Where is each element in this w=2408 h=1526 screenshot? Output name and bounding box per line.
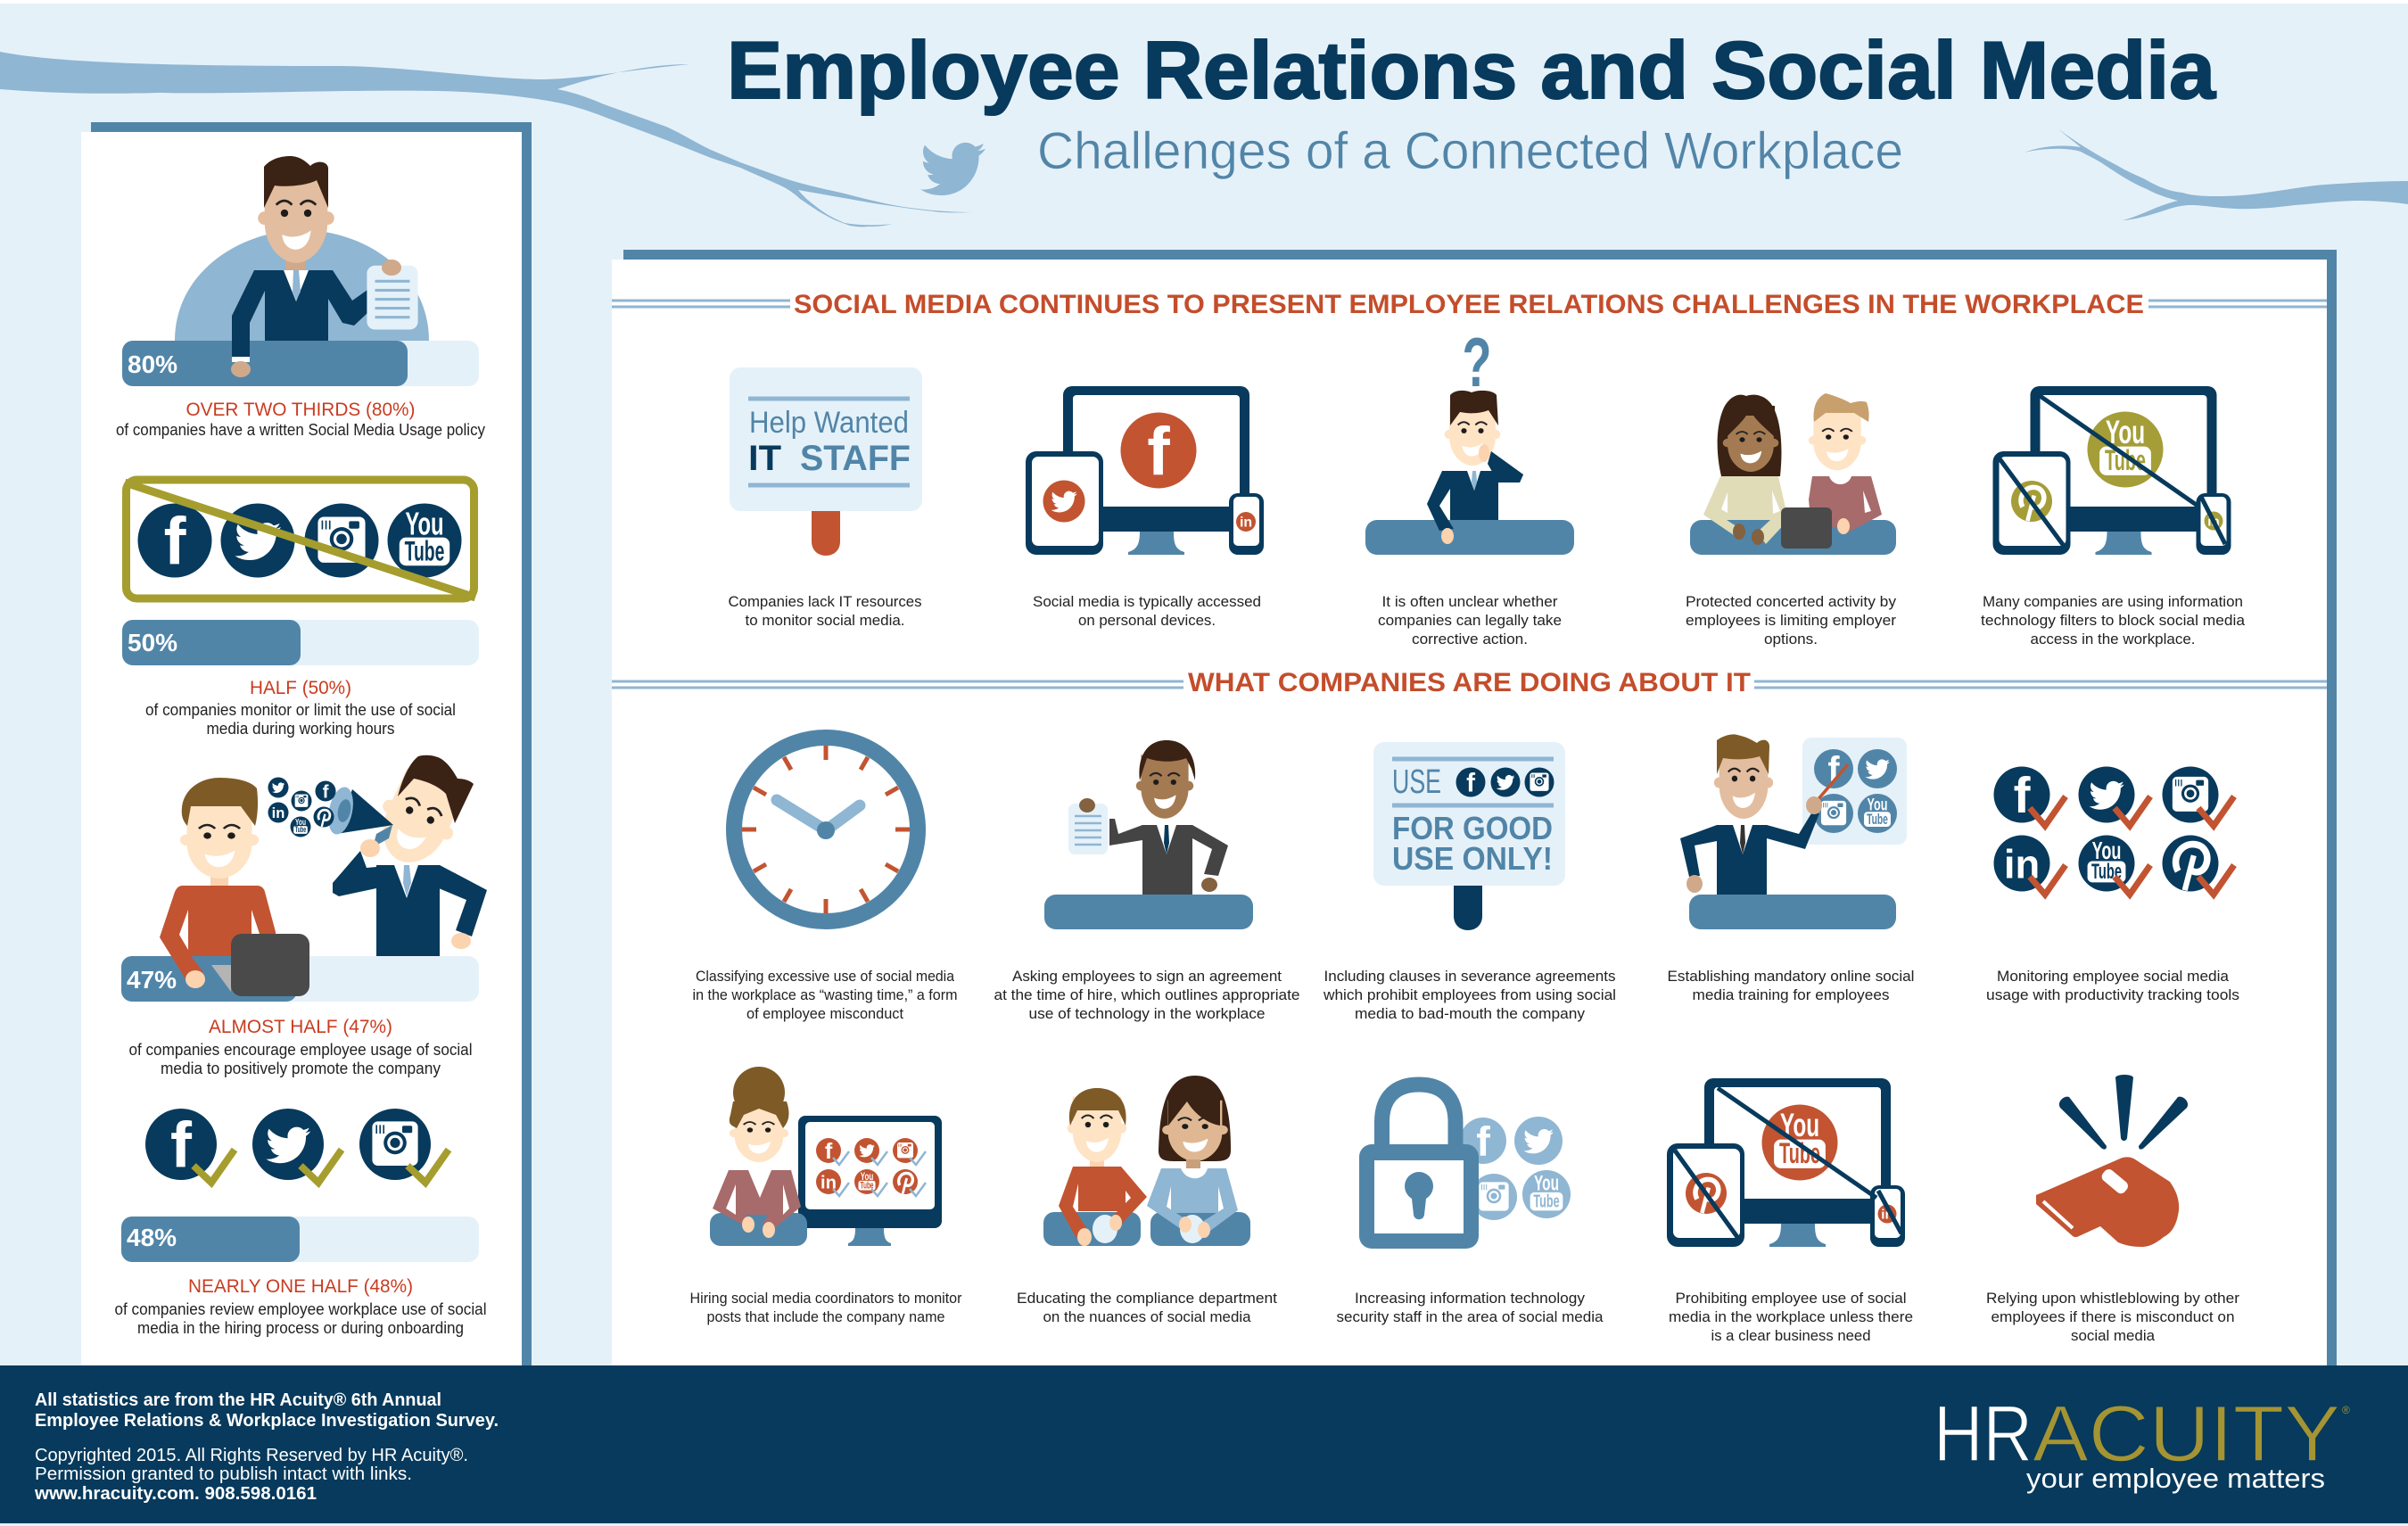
logo: HR Acuity: ACUITY bbox=[2033, 1389, 2340, 1478]
stat 1 text: of companies have a written Social Media Usage policy bbox=[116, 421, 485, 439]
stat 4: approved social icons bbox=[145, 1109, 449, 1183]
stat 4 text bbox=[114, 1300, 487, 1337]
stat 3: employee and megaphone promoter bbox=[121, 755, 487, 1002]
text: information technology filters: technology filters to block social media bbox=[1981, 612, 2246, 629]
text: wasting time: in the workplace as “wasting time,” a form bbox=[692, 986, 958, 1003]
text: sign an agreement: Asking employees to sign an agreement bbox=[1012, 968, 1282, 985]
text: legal uncertainty: corrective action. bbox=[1412, 631, 1528, 648]
icon: devices with prohibited social media: You bbox=[1780, 1106, 1819, 1143]
stat 4 bar bbox=[121, 1217, 479, 1262]
text: lack of IT resources bbox=[728, 593, 922, 629]
text: hiring coordinators bbox=[690, 1290, 962, 1325]
panel: main challenges and responses bbox=[612, 250, 2337, 1365]
icon: help wanted sign bbox=[730, 367, 922, 556]
logo: HR Acuity: ® bbox=[2342, 1404, 2350, 1416]
text: sign an agreement: at the time of hire, which outlines appropriate bbox=[994, 986, 1300, 1003]
text: wasting time: of employee misconduct bbox=[746, 1005, 903, 1022]
text: wasting time bbox=[692, 968, 958, 1022]
icon: devices with social media: f bbox=[1147, 414, 1170, 490]
text: security staff: security staff in the area of social media bbox=[1336, 1308, 1604, 1325]
footer survey source bbox=[35, 1390, 499, 1431]
stat 3 text: media to positively promote the company bbox=[161, 1060, 441, 1077]
icon: whistle bbox=[2036, 1075, 2188, 1247]
stat 2 text: media during working hours bbox=[207, 720, 394, 738]
text: severance clauses: which prohibit employees from using social bbox=[1323, 986, 1616, 1003]
icon: trainer with social board bbox=[1680, 734, 1907, 929]
stat 4 heading: NEARLY ONE HALF (48%) bbox=[188, 1276, 413, 1297]
icon: monitored social media grid: f bbox=[2014, 768, 2031, 824]
subtitle: Challenges of a Connected Workplace bbox=[1037, 122, 1903, 180]
icon: coordinator with monitor: You bbox=[861, 1170, 873, 1183]
stat 4 bar: 48% bbox=[127, 1224, 177, 1251]
text: severance clauses: media to bad-mouth the company bbox=[1355, 1005, 1586, 1022]
text: productivity tracking bbox=[1986, 968, 2239, 1003]
stat 3 heading: ALMOST HALF (47%) bbox=[209, 1017, 392, 1037]
text: severance clauses bbox=[1323, 968, 1616, 1022]
section heading: challenges: SOCIAL MEDIA CONTINUES TO PRESENT EMPLOYEE RELATIONS CHALLENGES IN THE WORKPLACE bbox=[794, 290, 2144, 319]
text: prohibiting use bbox=[1669, 1290, 1913, 1344]
icon: use for good sign bbox=[1373, 742, 1565, 930]
stat 1 heading: OVER TWO THIRDS (80%) bbox=[186, 400, 416, 420]
text: information technology filters bbox=[1981, 593, 2246, 648]
stat 2: blocked social media icons bbox=[125, 480, 475, 598]
icon: coordinator with monitor: f bbox=[825, 1139, 833, 1164]
stat 2 text bbox=[145, 701, 456, 738]
icon: devices with prohibited social media: Tube bbox=[1779, 1137, 1820, 1169]
text: whistleblowing: social media bbox=[2071, 1327, 2156, 1344]
text: mandatory training: media training for employees bbox=[1693, 986, 1889, 1003]
icon: monitored social media grid: You bbox=[2092, 837, 2121, 864]
text: lack of IT resources: to monitor social media. bbox=[746, 612, 904, 629]
text: prohibiting use: is a clear business need bbox=[1711, 1327, 1871, 1344]
text: mandatory training: Establishing mandatory online social bbox=[1668, 968, 1914, 985]
text: compliance education bbox=[1017, 1290, 1277, 1325]
text: information technology filters: access in the workplace. bbox=[2030, 631, 2196, 648]
panel: left statistics bbox=[81, 122, 532, 1365]
icon: confused manager bbox=[1365, 323, 1574, 555]
icon: monitored social media grid: Tube bbox=[2091, 860, 2122, 884]
text: information technology filters: Many companies are using information bbox=[1983, 593, 2243, 610]
icon: devices with social media: in bbox=[1240, 516, 1252, 531]
text: productivity tracking: usage with productivity tracking tools bbox=[1986, 986, 2239, 1003]
text: personal devices: on personal devices. bbox=[1078, 612, 1216, 629]
icon: devices with blocked social media bbox=[1992, 386, 2231, 555]
stat 2 bar: 50% bbox=[128, 629, 177, 656]
stat 1: businessman with policy: 80% bbox=[128, 351, 177, 378]
icon: compliance team bbox=[1043, 1076, 1250, 1246]
text: legal uncertainty: It is often unclear whether bbox=[1382, 593, 1558, 610]
icon: use for good sign: USE ONLY! bbox=[1392, 840, 1553, 877]
stat 4 text: of companies review employee workplace use of social bbox=[114, 1300, 487, 1318]
stat 3 text bbox=[128, 1041, 473, 1077]
text: protected concerted activity: options. bbox=[1764, 631, 1818, 648]
icon: devices with social media bbox=[1026, 386, 1264, 555]
text: whistleblowing: employees if there is misconduct on bbox=[1991, 1308, 2235, 1325]
stat 3: employee and megaphone promoter: f bbox=[323, 781, 329, 802]
stat 4 text: media in the hiring process or during onboarding bbox=[137, 1319, 464, 1337]
icon: use for good sign: f bbox=[1466, 769, 1475, 798]
stat 2: blocked social media icons: You bbox=[405, 505, 444, 541]
footer copyright: Copyrighted 2015. All Rights Reserved by HR Acuity®. bbox=[35, 1446, 468, 1465]
icon: trainer with social board: f bbox=[1827, 750, 1840, 789]
icon: two colleagues with tablet bbox=[1690, 393, 1896, 555]
icon: devices with prohibited social media bbox=[1667, 1078, 1905, 1247]
stat 3 text: of companies encourage employee usage of social bbox=[128, 1041, 473, 1059]
text: lack of IT resources: Companies lack IT resources bbox=[728, 593, 922, 610]
text: protected concerted activity: Protected concerted activity by bbox=[1686, 593, 1896, 610]
icon: use for good sign: FOR GOOD bbox=[1392, 810, 1553, 846]
text: hiring coordinators: Hiring social media coordinators to monitor bbox=[690, 1290, 962, 1307]
stat 2: blocked social media icons: Tube bbox=[405, 534, 444, 566]
text: protected concerted activity bbox=[1686, 593, 1896, 648]
icon: padlock with social icons: f bbox=[1476, 1118, 1490, 1165]
text: compliance education: on the nuances of social media bbox=[1043, 1308, 1251, 1325]
text: whistleblowing bbox=[1986, 1290, 2239, 1344]
icon: devices with blocked social media: You bbox=[2106, 413, 2145, 450]
icon: coordinator with monitor: Tube bbox=[860, 1181, 874, 1192]
icon: padlock with social icons: Tube bbox=[1533, 1192, 1560, 1212]
footer survey source: Employee Relations & Workplace Investigation Survey. bbox=[35, 1411, 499, 1431]
footer bbox=[0, 1365, 2408, 1523]
title: Employee Relations and Social Media bbox=[727, 26, 2216, 116]
icon: trainer with social board: Tube bbox=[1867, 811, 1888, 828]
logo: HR Acuity: your employee matters bbox=[2026, 1463, 2325, 1494]
icon: help wanted sign: IT bbox=[748, 439, 781, 478]
stat 3: employee and megaphone promoter: 47% bbox=[127, 966, 177, 994]
text: sign an agreement: use of technology in the workplace bbox=[1029, 1005, 1265, 1022]
text: sign an agreement bbox=[994, 968, 1300, 1022]
stat 2 heading: HALF (50%) bbox=[250, 678, 351, 698]
text: prohibiting use: media in the workplace unless there bbox=[1669, 1308, 1913, 1325]
icon: padlock with social icons: You bbox=[1534, 1172, 1559, 1196]
icon: padlock with social icons bbox=[1359, 1085, 1571, 1249]
footer copyright: www.hracuity.com. 908.598.0161 bbox=[34, 1484, 317, 1504]
text: legal uncertainty bbox=[1378, 593, 1562, 648]
icon: monitored social media grid bbox=[1994, 767, 2234, 895]
section heading: responses bbox=[612, 668, 2327, 697]
text: whistleblowing: Relying upon whistleblowing by other bbox=[1986, 1290, 2239, 1307]
text: security staff bbox=[1336, 1290, 1604, 1325]
stat 3: employee and megaphone promoter: in bbox=[272, 804, 285, 821]
text: personal devices bbox=[1033, 593, 1261, 629]
icon: help wanted sign: STAFF bbox=[800, 439, 911, 478]
stat 3: employee and megaphone promoter: You bbox=[295, 818, 306, 828]
icon: help wanted sign: Help Wanted bbox=[749, 406, 909, 440]
right tree branch bbox=[2025, 129, 2408, 220]
stat 3: employee and megaphone promoter: Tube bbox=[295, 825, 306, 834]
icon: coordinator with monitor: in bbox=[821, 1173, 837, 1192]
footer survey source: All statistics are from the HR Acuity® 6th Annual bbox=[35, 1390, 441, 1410]
icon: man holding agreement bbox=[1044, 740, 1253, 929]
icon: confused manager: ? bbox=[1463, 323, 1491, 401]
footer copyright bbox=[34, 1446, 468, 1504]
left tree branch bbox=[0, 52, 972, 227]
section heading: responses: WHAT COMPANIES ARE DOING ABOUT IT bbox=[1188, 668, 1751, 697]
text: compliance education: Educating the compliance department bbox=[1017, 1290, 1277, 1307]
stat 4: approved social icons: f bbox=[170, 1110, 193, 1182]
icon: twitter bird bbox=[920, 143, 985, 195]
stat 2 text: of companies monitor or limit the use of social bbox=[145, 701, 456, 719]
text: personal devices: Social media is typically accessed bbox=[1033, 593, 1261, 610]
icon: coordinator with monitor bbox=[710, 1067, 942, 1246]
text: mandatory training bbox=[1668, 968, 1914, 1003]
stat 2 bar bbox=[122, 620, 479, 665]
icon: monitored social media grid: in bbox=[2004, 841, 2040, 887]
icon: use for good sign: USE bbox=[1392, 763, 1441, 801]
stat 2: blocked social media icons: f bbox=[164, 504, 187, 579]
text: hiring coordinators: posts that include the company name bbox=[706, 1308, 945, 1325]
text: legal uncertainty: companies can legally take bbox=[1378, 612, 1562, 629]
text: severance clauses: Including clauses in severance agreements bbox=[1324, 968, 1616, 985]
logo: HR Acuity bbox=[1934, 1389, 2350, 1494]
logo: HR Acuity: HR bbox=[1934, 1389, 2033, 1478]
text: productivity tracking: Monitoring employee social media bbox=[1997, 968, 2230, 985]
text: security staff: Increasing information technology bbox=[1355, 1290, 1586, 1307]
icon: trainer with social board: You bbox=[1868, 795, 1887, 814]
stat 1: businessman with policy bbox=[122, 156, 479, 386]
text: wasting time: Classifying excessive use of social media bbox=[696, 968, 954, 985]
footer copyright: Permission granted to publish intact with links. bbox=[35, 1464, 412, 1484]
icon: devices with blocked social media: in bbox=[2207, 514, 2220, 529]
icon: devices with blocked social media: Tube bbox=[2105, 444, 2146, 476]
icon: devices with prohibited social media: in bbox=[1881, 1207, 1893, 1222]
text: prohibiting use: Prohibiting employee use of social bbox=[1675, 1290, 1907, 1307]
text: protected concerted activity: employees is limiting employer bbox=[1686, 612, 1896, 629]
icon: clock bbox=[734, 738, 918, 921]
